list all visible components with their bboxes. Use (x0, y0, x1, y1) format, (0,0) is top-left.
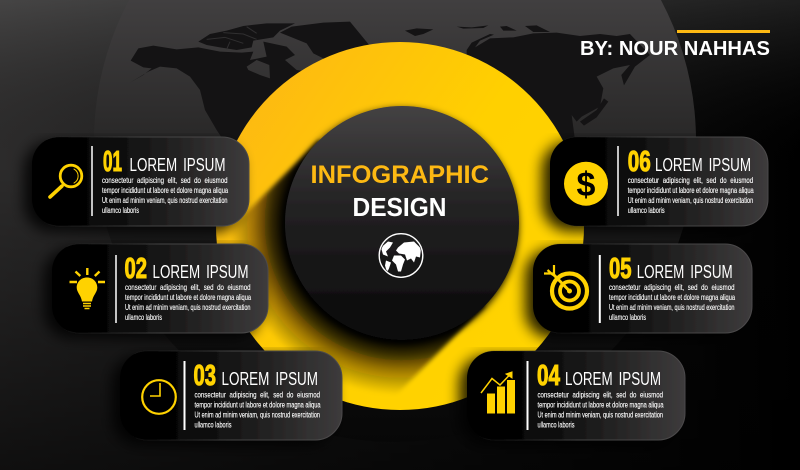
body text 04 (538, 390, 664, 430)
icon: dollar coin (564, 162, 608, 206)
map: eurasia (467, 33, 650, 150)
map: japan (580, 98, 608, 126)
heading 03: LOREM IPSUM (222, 369, 318, 389)
body text 01: Ut enim ad minim veniam, quis nostrud exercitation (102, 196, 228, 205)
title line: infographic: INFOGRAPHIC (310, 161, 489, 189)
number 06: 06 (628, 146, 651, 178)
body text 01 (102, 176, 228, 215)
icon: light bulb (70, 268, 105, 308)
author name: BY: NOUR NAHHAS (580, 37, 770, 60)
panel: 02 (52, 244, 268, 333)
heading 05: LOREM IPSUM (637, 262, 733, 282)
body text 02: consectetur adipiscing elit, sed do eiusmod (125, 283, 250, 292)
title line: design: DESIGN (352, 194, 446, 222)
body text 02: tempor incididunt ut labore et dolore magna aliqua (125, 293, 251, 302)
title (310, 161, 489, 222)
number 05: 05 (609, 253, 632, 285)
number 04: 04 (537, 360, 560, 392)
heading 06: LOREM IPSUM (655, 155, 751, 175)
body text 05: tempor incididunt ut labore et dolore magna aliqua (609, 293, 735, 302)
body text 01: ullamco laboris (102, 206, 139, 215)
panel: 04 (467, 351, 685, 440)
heading 04: LOREM IPSUM (565, 369, 661, 389)
body text 01: consectetur adipiscing elit, sed do eiusmod (102, 176, 228, 185)
body text 06 (628, 176, 754, 215)
world map silhouette (130, 22, 650, 150)
body text 05: ullamco laboris (609, 313, 646, 322)
body text 06: consectetur adipiscing elit, sed do eiusmod (628, 176, 753, 185)
author credit (580, 30, 770, 60)
panel: 03 (120, 351, 342, 440)
body text 06: ullamco laboris (628, 206, 665, 215)
body text 05 (609, 283, 735, 322)
body text 03: Ut enim ad minim veniam, quis nostrud exercitation (194, 410, 320, 420)
number 03: 03 (194, 360, 216, 392)
body text 02 (125, 283, 251, 322)
body text 04: consectetur adipiscing elit, sed do eiusmod (538, 390, 663, 400)
number 02: 02 (124, 253, 147, 285)
body text 03: ullamco laboris (194, 420, 232, 430)
body text 03: consectetur adipiscing elit, sed do eiusmod (194, 390, 320, 400)
icon: dollar coin: $ (577, 166, 596, 204)
map: iceland and northern islands (405, 25, 550, 36)
large background circle (94, 0, 696, 442)
heading 01: LOREM IPSUM (130, 155, 226, 175)
icon: magnifier (50, 165, 82, 197)
divider 06 (617, 146, 619, 216)
icon: clock (142, 380, 176, 414)
body text 01: tempor incididunt ut labore et dolore magna aliqua (102, 186, 228, 195)
body text 04: tempor incididunt ut labore et dolore magna aliqua (538, 400, 664, 410)
accent bar (677, 30, 770, 33)
divider 05 (599, 255, 601, 323)
body text 02: Ut enim ad minim veniam, quis nostrud exercitation (125, 303, 250, 312)
body text 05: consectetur adipiscing elit, sed do eiusmod (609, 283, 734, 292)
heading 02: LOREM IPSUM (152, 262, 248, 282)
map: greenland (280, 22, 373, 60)
icon: target with arrow (544, 265, 587, 308)
body text 06: Ut enim ad minim veniam, quis nostrud exercitation (628, 196, 753, 205)
map: arctic channels (207, 27, 257, 49)
body text 05: Ut enim ad minim veniam, quis nostrud exercitation (609, 303, 734, 312)
central dark circle (285, 106, 519, 340)
panel: 05 (533, 244, 752, 333)
divider 01 (91, 146, 93, 216)
divider 03 (184, 361, 186, 430)
yellow ring (216, 42, 584, 410)
map: arctic islands (198, 23, 295, 50)
body text 02: ullamco laboris (125, 313, 162, 322)
body text 06: tempor incididunt ut labore et dolore magna aliqua (628, 186, 754, 195)
panel: 06 (550, 137, 768, 226)
divider 02 (115, 255, 117, 323)
long shadow on yellow ring (232, 138, 487, 393)
divider 04 (526, 361, 528, 430)
panel: 01 (32, 137, 249, 226)
body text 03: tempor incididunt ut labore et dolore magna aliqua (194, 400, 321, 410)
body text 03 (194, 390, 321, 430)
icon: growth chart (481, 372, 515, 414)
map: north america (130, 42, 302, 140)
number 01: 01 (103, 146, 122, 178)
body text 04: Ut enim ad minim veniam, quis nostrud exercitation (538, 410, 663, 420)
icon: globe (379, 234, 423, 277)
body text 04: ullamco laboris (538, 420, 575, 430)
